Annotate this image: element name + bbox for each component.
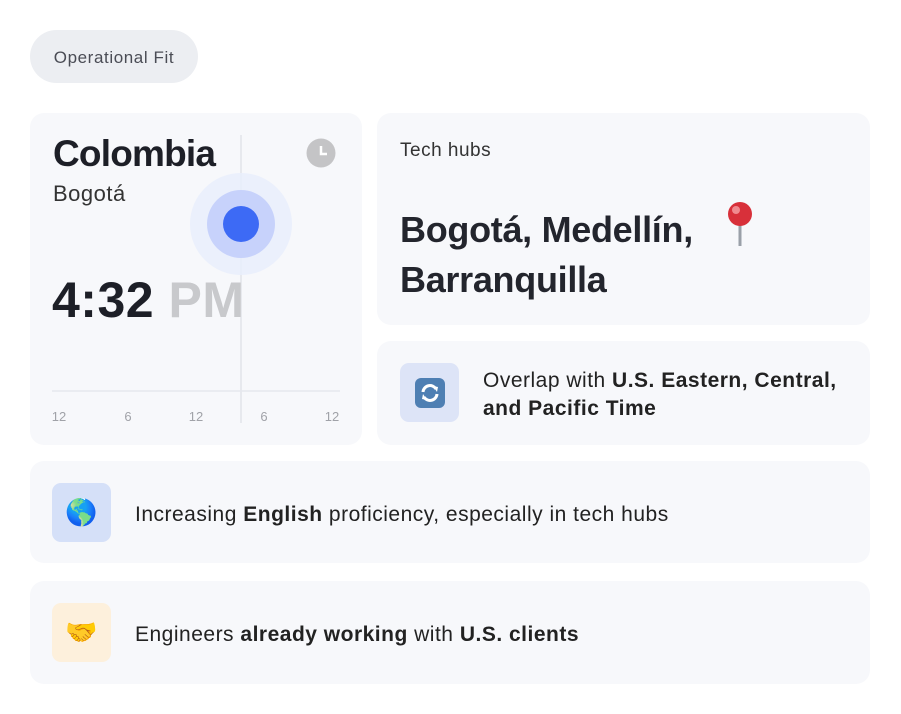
label: Tech hubs xyxy=(400,140,491,161)
icon: globe: 🌎 xyxy=(65,497,98,527)
text xyxy=(483,369,837,420)
icon: globe xyxy=(52,483,111,542)
icon: pin xyxy=(728,202,752,246)
pill: Operational Fit xyxy=(30,30,198,83)
panel: English xyxy=(30,461,870,563)
time: 4:32 PM: 4:32 PM xyxy=(52,272,244,328)
timeline graphic: 12 xyxy=(325,409,339,424)
panel: Colombia time xyxy=(30,113,362,445)
timeline graphic: 12 xyxy=(189,409,203,424)
subheading: Bogotá: Bogotá xyxy=(53,181,126,206)
icon: handshake: 🤝 xyxy=(65,617,98,647)
icon: handshake xyxy=(52,603,111,662)
timeline graphic xyxy=(52,135,340,424)
panel: Tech hubs xyxy=(377,113,870,325)
cities xyxy=(400,209,693,300)
panel: overlap xyxy=(377,341,870,445)
text: and Pacific Time xyxy=(483,397,656,420)
timeline graphic: 6 xyxy=(124,409,132,424)
cities: Bogotá, Medellín, xyxy=(400,209,693,250)
text: Increasing English proficiency, especially in tech hubs xyxy=(135,503,669,526)
heading: Colombia: Colombia xyxy=(53,133,215,174)
cities: Barranquilla xyxy=(400,259,606,300)
text: Overlap with U.S. Eastern, Central, xyxy=(483,369,837,392)
pill: Operational Fit: Operational Fit xyxy=(54,48,174,67)
panel: clients xyxy=(30,581,870,684)
text: Engineers already working with U.S. clients xyxy=(135,623,579,646)
icon: arrows xyxy=(400,363,459,422)
timeline graphic: 6 xyxy=(260,409,268,424)
timeline graphic: 12 xyxy=(52,409,66,424)
